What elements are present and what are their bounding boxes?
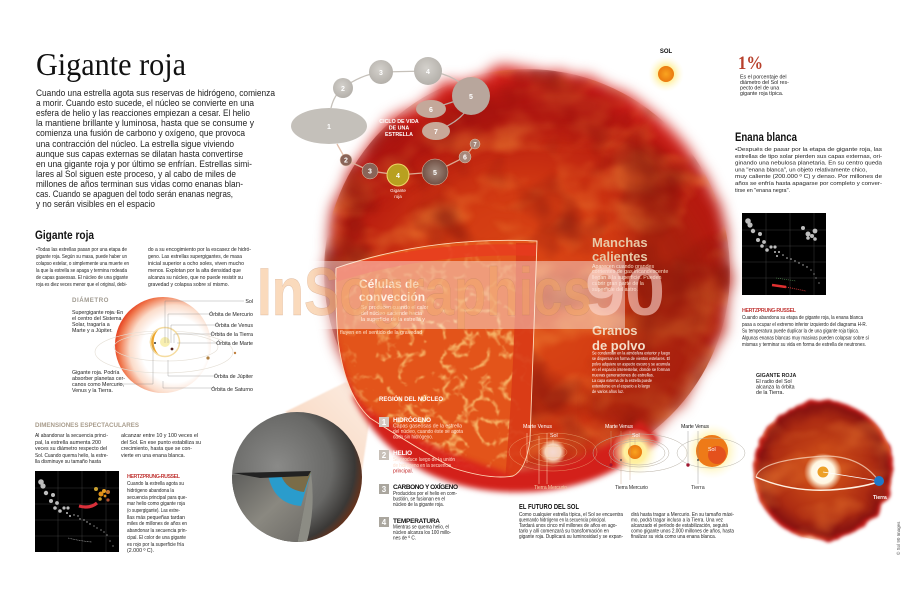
future sun stage 2 [593,424,687,491]
text block: enana blanca: muy caliente (200.000 º C) y denso. Por millones de [735,174,882,180]
future sun stage 1 [509,424,597,491]
item 3: carbono y oxígeno: Producidos por el helio en com- [393,491,457,497]
upper stages: 3 [379,70,383,77]
text block: Hertzsprung-Russell left: hidrógeno abandona la [127,488,174,494]
intro text block: cas. Cuando se apaguen del todo serán enanas negras, [36,189,233,199]
text block: dimensiones: Al abandonar la secuencia princi- [35,433,108,439]
label: gigante roja [72,370,125,394]
sun reference [648,49,684,92]
text block: el futuro del sol [519,504,734,540]
future sun stage 1: Tierra Mercurio [534,485,567,491]
item 3: carbono y oxígeno: 3 [382,485,387,494]
lower stages: 6 [463,154,467,162]
text block: Hertzsprung-Russell left: (o supergigante). Las estre- [127,508,180,514]
future sun stage 3: Marte Venus [681,424,709,430]
future sun stage 3: Sol [708,447,716,453]
text block: el futuro del sol: finalizar su vida como una enana blanca. [631,534,716,540]
text: granos de polvo: extenderse en el espacio a lo largo [592,384,650,390]
future sun stage 2: Sol [632,433,640,439]
heading: enana blanca: Enana blanca [735,130,797,144]
label: gigante roja small: El radio del Sol [756,379,792,385]
leader lines [105,301,244,388]
heading: Gigante roja: Gigante roja [35,228,94,242]
intro text block: aunque sus capas externas se dilatan hasta convertirse [36,149,243,159]
lower stages: 5 [433,170,437,177]
text block: Hertzsprung-Russell left: cipal. El color de una gigante [127,535,186,541]
planet orbits [95,331,233,373]
intro text block: millones de años terminan sus vidas como enanas blan- [36,179,243,189]
text block: dimensiones: alcanzar entre 10 y 100 veces el [121,433,198,439]
text block: Hertzsprung-Russell left: es rojo por la superficie fría [127,542,184,548]
text block: enana blanca: estrellas de tipo solar pierden sus capas externas, ori- [735,154,882,160]
text block: dimensiones [35,433,201,465]
label: gigante roja small [756,373,796,396]
watermark band: 90 [585,254,665,330]
outer rim fade bottom [352,395,660,492]
text: manchas calientes: Aparecen cuando grandes [592,264,654,270]
upper dark red zone [340,84,640,200]
text block: Hertzsprung-Russell right: HERTZPRUNG-RUSSEL [742,308,797,314]
future sun stage 1: Sol [550,433,558,439]
future sun stage 2: Tierra Mercurio [615,485,648,491]
label: supergigante [72,310,123,334]
sun reference: SOL [660,49,672,55]
item 3: carbono y oxígeno [379,482,458,508]
text: células de convección: del núcleo asciende hacia [361,311,422,317]
text block: Gigante roja columns: de capas gaseosas. El núcleo de una gigante [36,275,128,281]
text block: Hertzsprung-Russell right [742,308,869,348]
big ellipse stage 1: 1 [327,124,331,131]
text block: el futuro del sol: dirá hasta tragar a Mercurio. En su tamaño máxi- [631,512,734,518]
cycle title: DE UNA [389,126,409,132]
text: granos de polvo: La capa externa de la estrella puede [592,378,652,384]
text block: Hertzsprung-Russell right: Cuando abandona su etapa de gigante roja, la enana blanca [742,315,863,321]
text: células de convección: Se producen cuando el calor [361,305,429,311]
text block: Hertzsprung-Russell left: llas más pequeñas tardan [127,515,185,521]
text block: el futuro del sol: mo, podrá tragar incluso a la Tierra. Una vez [631,518,723,524]
stat: 1%: Es el porcentaje del [740,74,787,80]
small red giant with earth orbit: Tierra [873,495,887,501]
lower stages: roja [394,194,402,199]
title: Gigante roja [36,46,186,82]
right dark zone [590,150,720,450]
legend heading: REGIÓN DEL NÚCLEO [379,395,443,403]
item 3: carbono y oxígeno: bustión, se fusionan en el [393,496,445,502]
text block: Hertzsprung-Russell left: Cuando la estrella agota su [127,481,184,487]
credit: © Sol 90 Images [895,521,901,555]
text block: Gigante roja columns: gravedad y colapsa sobre sí mismo. [148,282,229,288]
diagram: diámetro [72,297,253,394]
intro text block: comienza una fusión de carbono y oxígeno, que provoca [36,128,245,138]
red giant disc [150,327,236,360]
text: células de convección: Células de [359,277,419,291]
light beam [285,382,372,470]
text block: el futuro del sol: quemando hidrógeno en la secuencia principal. [519,518,606,524]
text: manchas calientes: calientes [592,249,648,264]
cutaway core wedge [336,236,540,484]
item 1: hidrógeno [379,415,463,440]
main sun: red giant [324,69,730,492]
orbit labels: Órbita de la Tierra [211,331,253,338]
text: granos de polvo: de varios años luz. [592,389,624,395]
future sun stage 3 [677,423,745,491]
lower stages: 4 [396,173,400,180]
text block: el futuro del sol: EL FUTURO DEL SOL [519,504,580,511]
text block: dimensiones: Sol. Cuando quema helio, la estre- [35,453,108,459]
orbit labels: Órbita de Venus [215,322,253,329]
label: gigante roja: canos como Mercurio, [72,382,124,388]
lower stages: 3 [368,168,372,176]
text block: Hertzsprung-Russell right: mismas y terminar su vida en forma de estrella de neutrones. [742,342,866,348]
text block: Hertzsprung-Russell left: (2.000 º C). [127,548,154,554]
text block: enana blanca [735,147,882,194]
big ellipse stage 1 [291,108,367,144]
lower stages: 7 [473,142,477,148]
text block: enana blanca: ginando una nebulosa planetaria. En su centro queda [735,161,882,167]
cycle title: ESTRELLA [385,132,413,138]
item 1: hidrógeno: 1 [382,418,387,427]
text block: Hertzsprung-Russell left: secuencia principal para que- [127,495,187,501]
item 2: helio [379,450,455,474]
text block: Gigante roja columns: do a su encogimiento por la escasez de hidró- [148,247,251,253]
label: supergigante: Solar, tragaría a [72,322,110,328]
text: granos de polvo: nuevas generaciones de estrellas. [592,372,654,378]
text block: dimensiones: crecimiento, hasta que se con- [121,446,192,452]
upper stages [333,57,490,140]
stat: 1%: pecto del de una [740,86,779,92]
text block: Hertzsprung-Russell left: abandonar la secuencia prin- [127,528,187,534]
label: gigante roja: absorber planetas cer- [72,376,125,382]
intro text block: la mantiene brillante y luminosa, hasta que se consume y [36,118,254,128]
item 3: carbono y oxígeno: núcleo de la gigante roja. [393,502,444,508]
item 1: hidrógeno: Capas gaseosas de la estrella [393,424,462,430]
orbit labels [209,299,253,393]
intro text block: en una gigante roja y por último se enfrían. Estrellas simi- [36,159,252,169]
label: gigante roja small: GIGANTE ROJA [756,373,796,379]
label: gigante roja small: de la Tierra. [756,390,784,396]
text: granos de polvo [592,323,670,395]
text block: enana blanca: tirse en "enana negra". [735,188,790,194]
text: manchas calientes: llegan a la superficie. Pueden [592,275,662,281]
upper stages: 4 [426,69,430,76]
text block: Gigante roja columns [36,247,251,288]
text: manchas calientes: superficie del astro. [592,287,638,293]
text block: el futuro del sol: gigante roja. Duplicará su luminosidad y se expan- [519,534,623,540]
label: supergigante: Marte y a Júpiter. [72,328,113,334]
item 4: temperatura: núcleo alcanza los 100 millo- [393,530,451,536]
orbit labels: Órbita de Mercurio [209,311,253,318]
text block: el futuro del sol: Tardará unos cinco mil millones de años en ago- [519,523,617,529]
connecting lines [331,71,475,175]
item 1: hidrógeno: HIDRÓGENO [393,415,431,424]
intro text block: y no serán visibles en el espacio [36,199,155,209]
lower stages: 2 [344,158,348,164]
label: supergigante: Supergigante roja. En [72,310,123,316]
label: diámetro: DIÁMETRO [72,297,109,304]
upper stages: 2 [341,86,345,93]
item 4: temperatura: nes de º C. [393,536,416,542]
lower stages: Gigante [390,188,406,193]
core region legend [379,395,463,542]
intro text block [36,88,275,209]
life cycle of a star [291,57,490,199]
orbit labels: Órbita de Saturno [211,386,253,393]
watermark band: InSographics [257,254,592,330]
item 4: temperatura: TEMPERATURA [393,518,440,525]
intro text block: una contracción del núcleo. La estrella sigue viviendo [36,139,234,149]
text: manchas calientes: cubrir gran parte de la [592,281,644,287]
item 2: helio: Se produce luego de la unión [393,457,455,463]
intro text block: a morir. Cuando esto sucede, el núcleo se convierte en una [36,98,254,108]
item 2: helio: 2 [382,451,387,460]
item 4: temperatura: Mientras se quema helio, el [393,524,449,530]
text: células de convección: fluyen en el sentido de la gravedad [340,330,422,336]
item 3: carbono y oxígeno: CARBONO Y OXÍGENO [393,482,458,491]
text block: Gigante roja columns: gigante roja. Según su masa, puede haber un [36,254,127,260]
upper stages: 6 [429,107,433,114]
text block: dimensiones: pal, la estrella aumenta 200 [35,440,101,446]
inner band [506,243,536,476]
text block: Hertzsprung-Russell left: miles de millones de años en [127,521,187,527]
text block: el futuro del sol: como gigante unos 2.000 millones de años, hasta [631,528,734,534]
text: granos de polvo: Se condensan en la atmósfera exterior y luego [592,350,670,356]
item 1: hidrógeno: del núcleo, cuando éste se agota [393,429,463,435]
stat: 1%: gigante roja típica. [740,91,783,97]
text block: enana blanca: una "enana blanca", un objeto relativamente chico, [735,167,867,173]
text block: dimensiones: del Sol. En ese punto estabiliza su [121,440,201,446]
heading: dimensiones espectaculares: DIMENSIONES ESPECTACULARES [35,422,139,429]
item 2: helio: de hidrógeno en la secuencia [393,463,451,469]
text block: Gigante roja columns: alcanza su núcleo, que no puede resistir su [148,275,243,281]
item 1: hidrógeno: dado sin hidrógeno. [393,434,433,440]
stat: 1%: 1% [738,53,763,74]
intro text block: Cuando una estrella agota sus reservas de hidrógeno, comienza [36,88,275,98]
future sun stage 3: Tierra [691,485,705,491]
text: granos de polvo: en el espacio interestelar, donde se forman [592,367,670,373]
text block: el futuro del sol: tarlo y allí comenzará su transformación en [519,528,609,534]
stat: 1% [738,53,789,97]
text block: Gigante roja columns: •Todas las estrellas pasan por una etapa de [36,247,127,253]
lower stages [340,139,480,199]
text: granos de polvo: polvo adquiere un aspecto oscuro y se acumula [592,362,670,368]
label: supergigante: el centro del Sistema [72,316,122,322]
text: granos de polvo: Granos [592,323,638,338]
item 2: helio: principal. [393,468,413,474]
text: manchas calientes [592,235,668,293]
text block: Gigante roja columns: colapso estelar, o simplemente una muerte en [36,261,129,267]
grey planet cutaway sphere [232,412,362,545]
intro text block: esfera de helio y las reacciones empiezan a cesar. El helio [36,108,250,118]
text block: Hertzsprung-Russell left: HERTZPRUNG-RUSSEL [127,474,181,480]
orbit labels: Sol [245,299,253,305]
text: células de convección: convección [359,290,425,304]
item 4: temperatura [379,517,451,542]
label: gigante roja: Venus y la Tierra. [72,388,113,394]
upper stages: 5 [469,94,473,101]
text block: el futuro del sol: alcanzado el período de estabilización, seguirá [631,523,728,529]
orbit labels: Órbita de Marte [216,340,253,347]
text block: Gigante roja columns: menos. Explotan por la alta densidad que [148,268,241,274]
text: células de convección [340,277,429,336]
text block: Hertzsprung-Russell left: mar helio como gigante roja [127,501,185,507]
text: granos de polvo: se dispersan en forma de vientos estelares. El [592,356,670,362]
stat: 1%: diámetro del Sol res- [740,80,789,86]
text: células de convección: la superficie de la estrella y [361,317,425,323]
cycle title [379,119,419,138]
text block: enana blanca: años se enfría hasta apagarse por completo y conver- [735,181,882,187]
text block: Hertzsprung-Russell right: Su temperatura puede duplicar la de una gigante roja típica. [742,329,859,335]
text block: Gigante roja columns: roja es diez veces menor que el original, debi- [36,282,127,288]
text block: Hertzsprung-Russell right: pasa a ocupar el extremo inferior izquierdo del diagrama H-R. [742,322,867,328]
text block: dimensiones: vierte en una enana blanca. [121,453,185,459]
text block: Gigante roja columns: la que la estrella se apaga y termina rodeada [36,268,127,274]
label: gigante roja small: alcanza la órbita [756,384,795,390]
text block: Gigante roja columns: geno. Las estrellas supergigantes, de masa [148,254,242,260]
chart: Hertzsprung-Russell red giant [35,471,119,552]
text: granos de polvo: de polvo [592,338,646,353]
chart: Hertzsprung-Russell white dwarf [742,213,826,295]
cycle title: CICLO DE VIDA [379,119,419,125]
text block: Gigante roja columns: inicial superior a ocho soles, viven mucho [148,261,244,267]
text: manchas calientes: corrientes de gas incandescente [592,269,668,275]
text: manchas calientes: Manchas [592,235,648,250]
text block: Hertzsprung-Russell right: Algunas enanas blancas muy masivas pueden colapsar sobre sí [742,335,869,341]
upper stages: 7 [434,129,438,136]
label: gigante roja: Gigante roja. Podría [72,370,119,376]
item 2: helio: HELIO [393,450,412,457]
text block: el futuro del sol: Como cualquier estrella típica, el Sol se encuentra [519,512,623,518]
intro text block: lares al Sol siguen este proceso, y al cabo de miles de [36,169,236,179]
text block: enana blanca: •Después de pasar por la etapa de gigante roja, las [735,147,882,153]
small red giant with earth orbit [753,400,893,540]
future sun stage 2: Marte Venus [605,424,633,430]
item 4: temperatura: 4 [382,518,387,527]
future sun stage 1: Marte Venus [523,424,552,430]
supergiant disc [115,297,211,393]
orbit labels: Órbita de Júpiter [214,373,253,380]
text block: dimensiones: veces su diámetro respecto del [35,446,107,452]
text block: Hertzsprung-Russell left [127,474,187,554]
text block: dimensiones: lla disminuye su tamaño hasta [35,459,101,465]
